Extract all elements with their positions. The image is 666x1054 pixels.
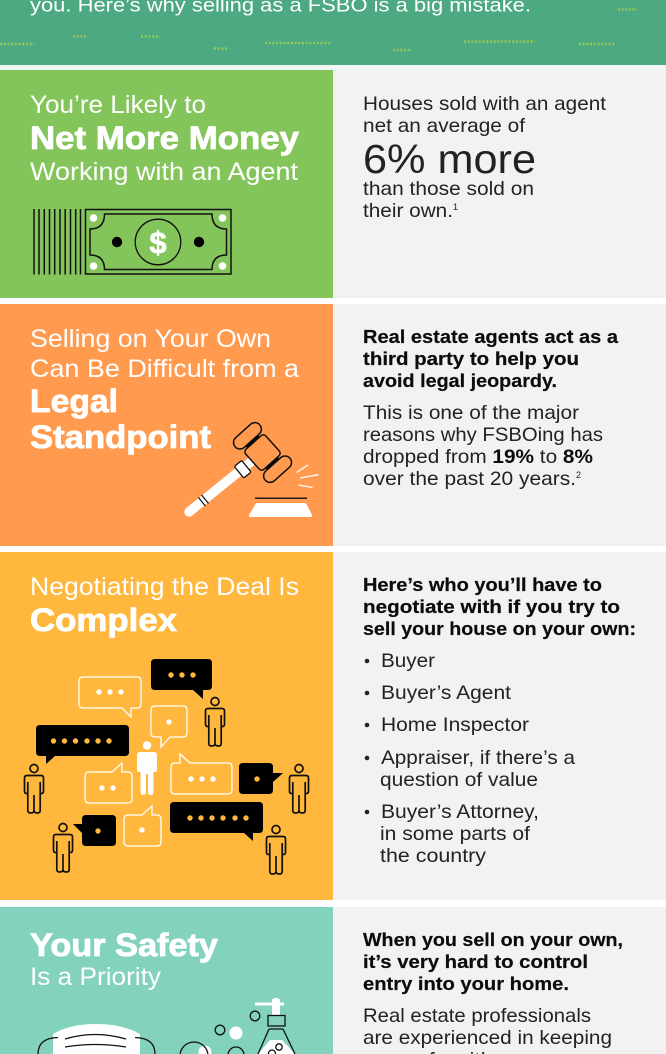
panel: legal explanation: dropped from 19% to 8% (363, 446, 593, 468)
bullet list: question of value (380, 769, 538, 791)
icon: soap and bubbles (180, 998, 295, 1054)
panel: legal explanation: 2 (576, 470, 581, 480)
heading: negotiating: Complex (30, 602, 177, 638)
heading: safety: Your Safety (30, 927, 218, 963)
panel: intro banner (0, 0, 666, 65)
panel: safety explanation: are experienced in keeping (363, 1027, 612, 1049)
panel: legal explanation: third party to help you (363, 348, 579, 369)
panel: safety (0, 907, 333, 1054)
heading: net more money: Working with an Agent (30, 158, 298, 186)
icon: dollar bill (34, 209, 231, 274)
panel: who you negotiate with: sell your house on your own: (363, 618, 636, 639)
heading: safety (30, 927, 218, 991)
panel: safety explanation: it’s very hard to control (363, 951, 588, 972)
panel: legal explanation: Real estate agents act as a (363, 326, 619, 347)
panel: net more money (0, 70, 333, 298)
heading: legal standpoint: Selling on Your Own (30, 325, 271, 353)
bullet list: in some parts of (380, 823, 531, 845)
panel: legal explanation: This is one of the major (363, 402, 580, 424)
heading: legal standpoint: Legal (30, 383, 118, 419)
heading: negotiating (30, 573, 299, 638)
panel: six percent stat: net an average of (363, 115, 526, 137)
panel: safety explanation: entry into your home. (363, 973, 569, 994)
panel: legal explanation: avoid legal jeopardy. (363, 370, 557, 391)
panel: safety explanation: When you sell on your own, (363, 929, 623, 950)
bullet list: Buyer (381, 650, 436, 672)
heading: legal standpoint: Standpoint (30, 419, 211, 455)
panel: six percent stat: than those sold on (363, 178, 534, 200)
heading: safety: Is a Priority (30, 963, 162, 991)
icon: face mask (38, 1024, 155, 1054)
heading: legal standpoint: Can Be Difficult from a (30, 355, 299, 383)
bullet list: Buyer’s Attorney, (381, 801, 539, 823)
bullet list (365, 650, 575, 867)
icon: dollar bill: $ (149, 225, 167, 260)
panel: legal explanation: reasons why FSBOing has (363, 424, 603, 446)
panel: six percent stat (333, 70, 666, 298)
panel: legal explanation (333, 304, 666, 546)
panel: six percent stat: 1 (453, 202, 458, 212)
heading: negotiating: Negotiating the Deal Is (30, 573, 299, 601)
panel: who you negotiate with (333, 552, 666, 900)
icon: gavel (189, 420, 318, 517)
heading: net more money: You’re Likely to (30, 91, 206, 119)
heading: net more money: Net More Money (30, 120, 299, 156)
big stat: 6% more (363, 136, 536, 182)
panel: safety explanation: Real estate professionals (363, 1005, 591, 1027)
panel: safety explanation (333, 907, 666, 1054)
panel: six percent stat: their own. (363, 200, 453, 222)
panel: who you negotiate with: negotiate with if you try to (363, 596, 620, 617)
heading: net more money (30, 91, 299, 186)
panel: who you negotiate with: Here’s who you’ll have to (363, 574, 602, 595)
bullet list: Buyer’s Agent (381, 682, 512, 704)
panel: legal standpoint (0, 304, 333, 546)
bullet list: Home Inspector (381, 714, 530, 736)
bullet list: Appraiser, if there’s a (381, 747, 575, 769)
panel: negotiating (0, 552, 333, 900)
panel: legal explanation: over the past 20 years. (363, 468, 576, 490)
bullet list: the country (380, 845, 486, 867)
panel: six percent stat: Houses sold with an agent (363, 93, 607, 115)
icon: people negotiating (24, 659, 308, 874)
heading: legal standpoint (30, 325, 299, 455)
